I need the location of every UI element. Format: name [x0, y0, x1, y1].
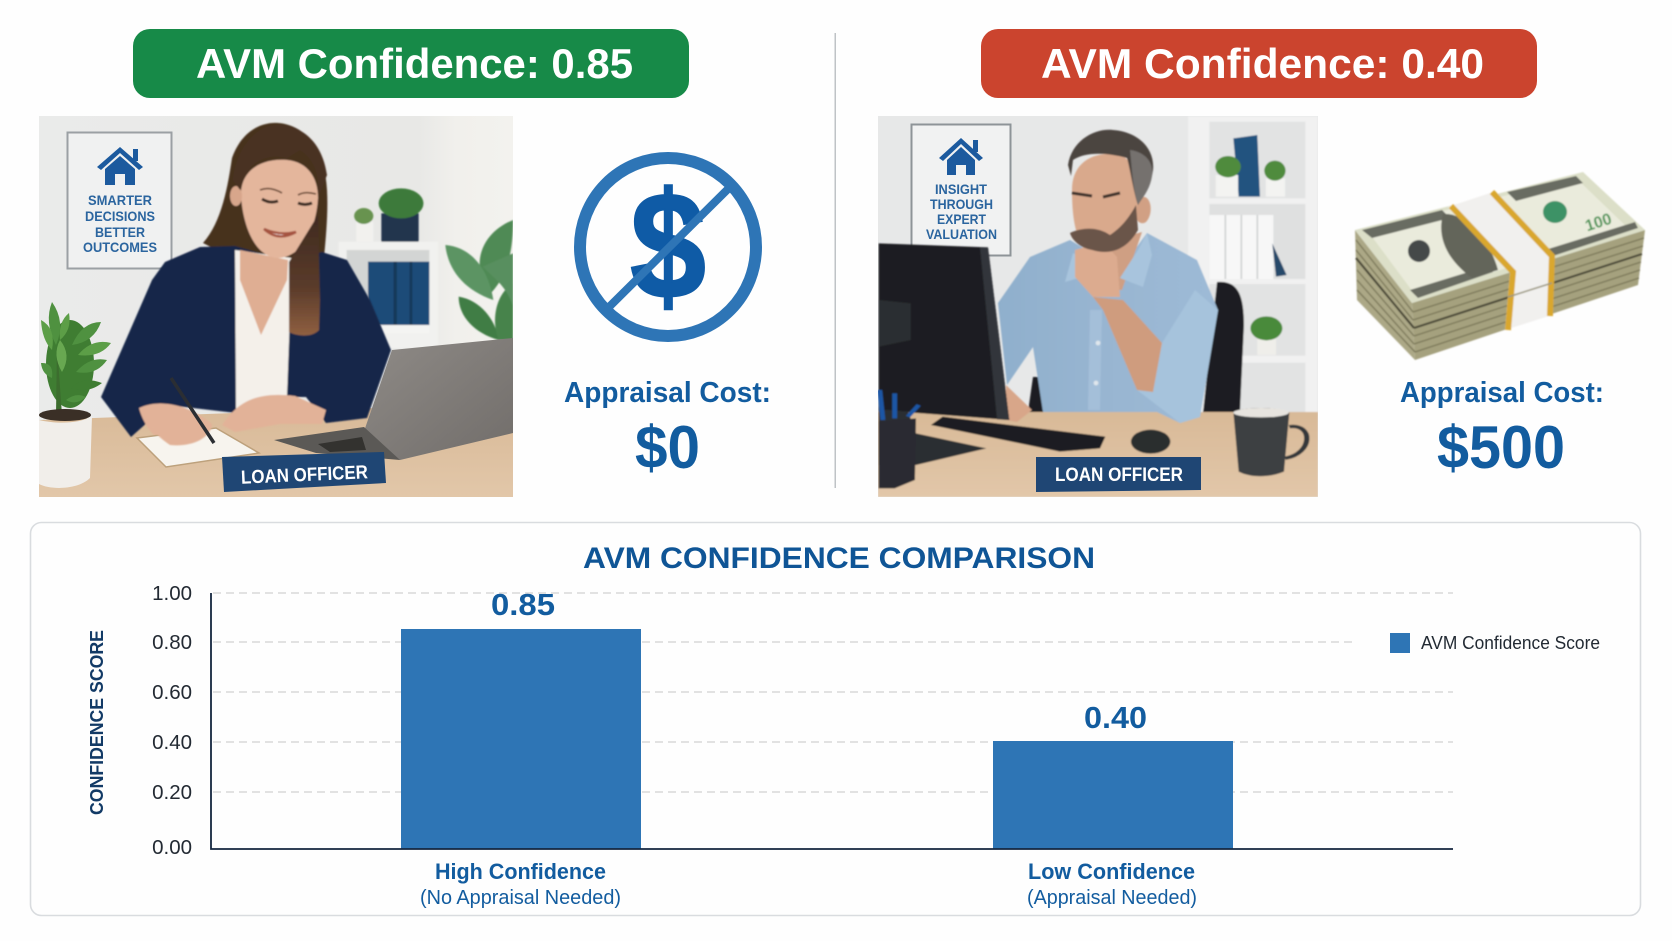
- wall poster: EXPERT: [937, 211, 986, 227]
- category label: high confidence: [420, 859, 621, 909]
- chart title: AVM CONFIDENCE COMPARISON: [583, 542, 1095, 575]
- wall poster: OUTCOMES: [83, 239, 157, 255]
- y axis tick labels: 0.20: [152, 781, 192, 804]
- illustration: stack of banknotes: 100: [1583, 211, 1614, 235]
- desk: [878, 412, 1318, 497]
- illustration: stack of banknotes: [1355, 172, 1645, 360]
- hair: [1068, 130, 1153, 205]
- bar: low confidence: [993, 741, 1233, 849]
- appraisal cost: five hundred: $500: [1437, 414, 1565, 481]
- bar: high confidence: [401, 629, 641, 849]
- wall poster: INSIGHT: [935, 181, 987, 197]
- wall poster: THROUGH: [930, 196, 993, 212]
- bookcase: [1188, 116, 1318, 413]
- nameplate: [1036, 457, 1201, 492]
- badge: high confidence: [133, 29, 689, 98]
- hair back: [202, 122, 328, 259]
- badge: high confidence: AVM Confidence: 0.85: [196, 40, 633, 87]
- category label: low confidence: [1027, 859, 1197, 909]
- nameplate: LOAN OFFICER: [241, 462, 369, 489]
- y axis tick labels: 0.40: [152, 731, 192, 754]
- hand: [1075, 242, 1120, 297]
- appraisal cost: zero: [564, 377, 771, 481]
- y axis title: CONFIDENCE SCORE: [87, 630, 107, 815]
- neck: [1111, 232, 1142, 291]
- pen: [171, 378, 214, 443]
- value label: 0.40: 0.40: [1084, 700, 1147, 735]
- mug: [1233, 408, 1289, 476]
- man: [998, 130, 1218, 423]
- wall poster: SMARTER: [88, 192, 152, 208]
- plant pot: [39, 416, 92, 488]
- forearm: [1093, 297, 1162, 392]
- laptop: [274, 338, 513, 460]
- wall poster: DECISIONS: [85, 208, 155, 224]
- appraisal cost: zero: $0: [635, 414, 700, 481]
- category label: low confidence: (Appraisal Needed): [1027, 887, 1197, 909]
- left plant: [39, 302, 111, 421]
- chair: [1028, 282, 1244, 412]
- y axis tick labels: 0.80: [152, 631, 192, 654]
- appraisal cost: zero: Appraisal Cost:: [564, 377, 771, 409]
- blazer: [101, 246, 391, 437]
- hair strand: [289, 215, 320, 336]
- nameplate: [222, 452, 386, 492]
- resting hand: [1006, 385, 1032, 422]
- right plant: [445, 220, 513, 340]
- keyboard: [931, 417, 1105, 452]
- category label: high confidence: High Confidence: [435, 859, 606, 884]
- shelf unit: [339, 188, 438, 348]
- badge: low confidence: AVM Confidence: 0.40: [1041, 40, 1484, 87]
- axes: [211, 593, 1453, 849]
- collar: [1065, 233, 1152, 287]
- y axis tick labels: 0.60: [152, 681, 192, 704]
- beard: [1070, 205, 1138, 252]
- value label: 0.85: 0.85: [491, 587, 555, 622]
- notebook: [137, 428, 259, 467]
- wall poster: VALUATION: [926, 226, 997, 242]
- pen cup: [879, 418, 916, 488]
- y axis tick labels: 1.00: [152, 582, 192, 605]
- mouse: [1131, 430, 1170, 454]
- pens: [880, 390, 919, 420]
- y axis tick labels: [152, 582, 192, 859]
- appraisal cost: five hundred: Appraisal Cost:: [1400, 377, 1604, 409]
- hands: [138, 402, 208, 435]
- desk: [39, 403, 513, 497]
- photo: thoughtful loan officer at monitor: [878, 116, 1318, 497]
- icon: house: [97, 147, 143, 185]
- photo: smiling loan officer with laptop: [39, 116, 513, 497]
- icon: no dollar sign: $: [630, 161, 706, 331]
- icon: no dollar sign: [580, 158, 756, 336]
- legend: AVM Confidence Score: [1421, 633, 1600, 653]
- paper band: [1448, 193, 1553, 330]
- panel: confidence chart: [30, 522, 1640, 916]
- y axis tick labels: 0.00: [152, 836, 192, 859]
- category label: high confidence: (No Appraisal Needed): [420, 887, 621, 909]
- wall poster: [912, 124, 1010, 256]
- wall poster: BETTER: [95, 224, 145, 240]
- wall poster: [68, 132, 172, 268]
- sleeve: [1137, 290, 1218, 423]
- face: [1071, 153, 1138, 236]
- monitor: [879, 243, 1009, 420]
- category label: low confidence: Low Confidence: [1028, 859, 1195, 884]
- appraisal cost: five hundred: [1400, 377, 1604, 481]
- shirt: [998, 233, 1218, 423]
- badge: low confidence: [981, 29, 1537, 98]
- nameplate: LOAN OFFICER: [1055, 465, 1183, 486]
- woman: [101, 123, 391, 445]
- icon: house: [939, 138, 983, 175]
